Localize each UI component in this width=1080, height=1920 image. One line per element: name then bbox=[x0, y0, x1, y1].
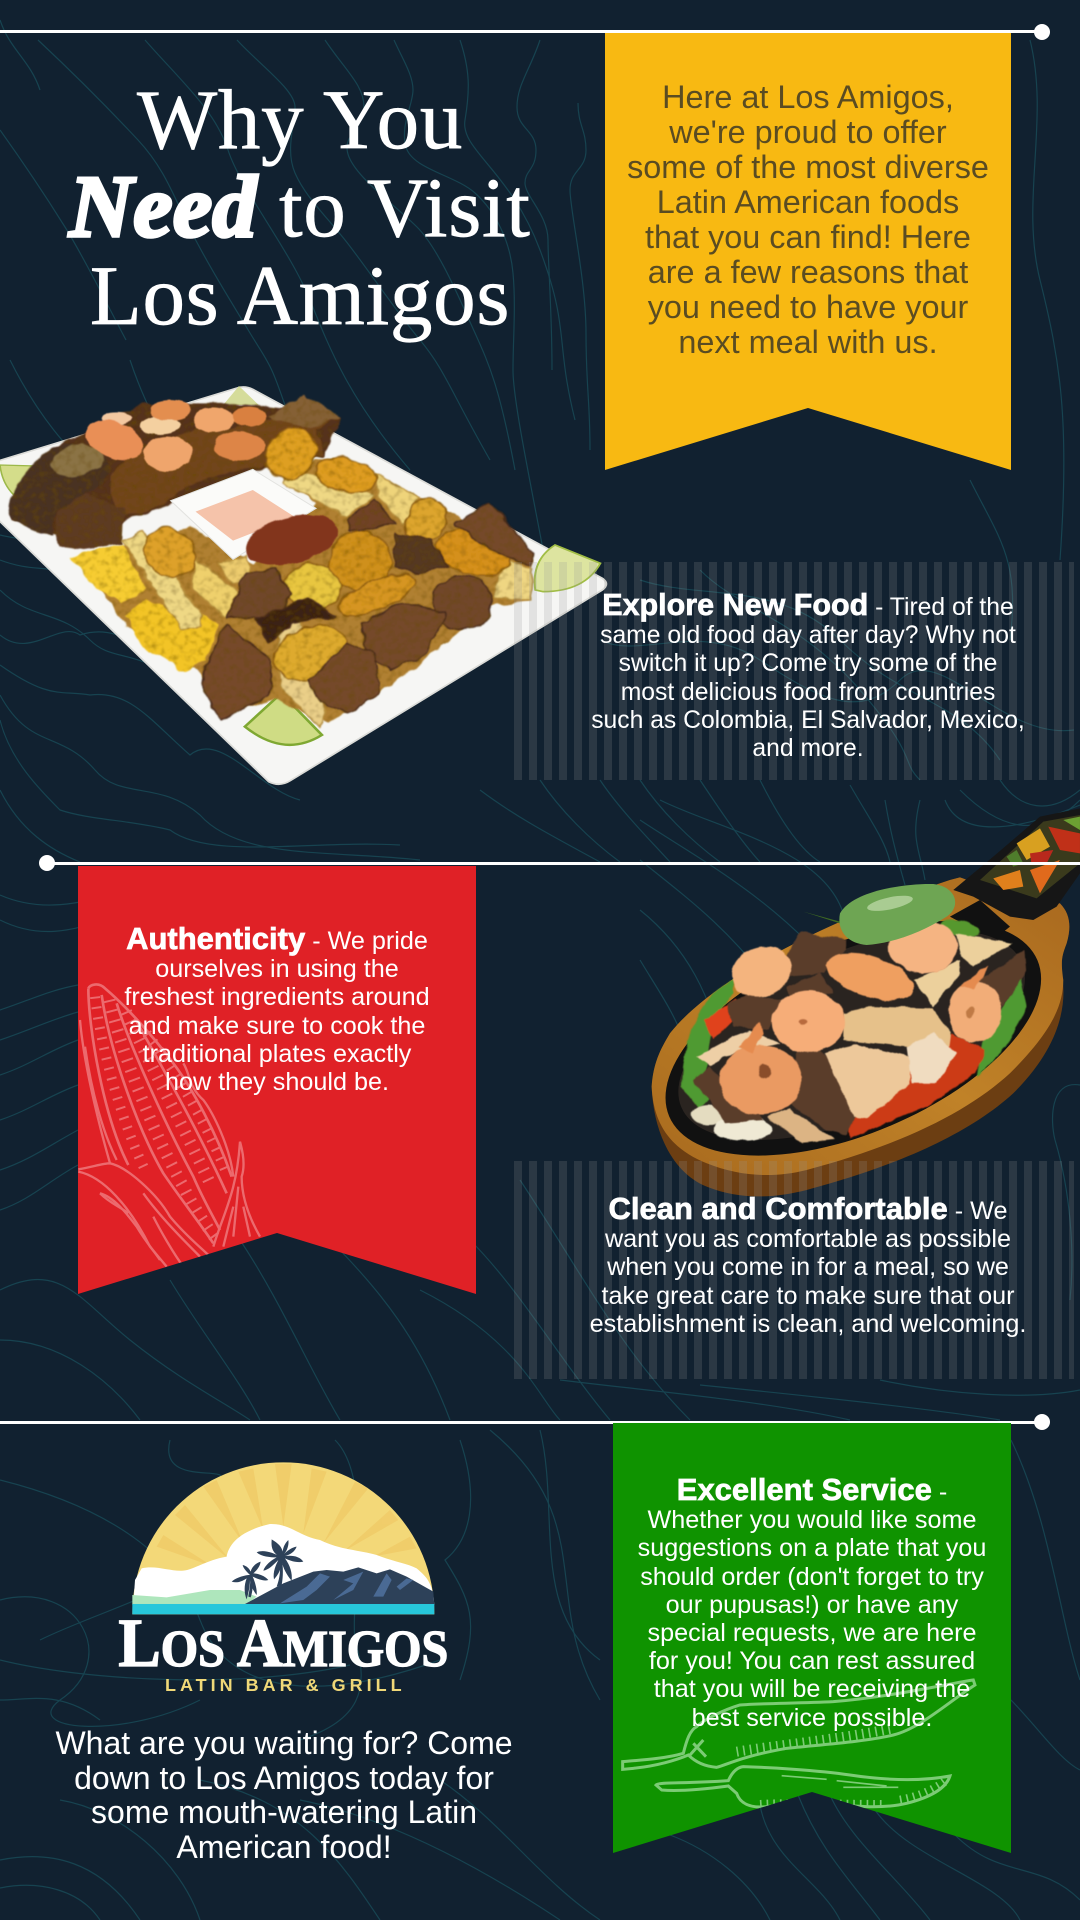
wordmark: LOS AMIGOS bbox=[118, 1605, 448, 1681]
intro text: next meal with us. bbox=[678, 324, 938, 360]
text: explore new food: switch it up? Come try some of the bbox=[619, 650, 997, 677]
panel: green ribbon bbox=[613, 1423, 1011, 1853]
text: excellent service: Excellent Service - bbox=[677, 1472, 947, 1507]
text: excellent service: our pupusas!) or have any bbox=[666, 1591, 958, 1619]
yuca sticks bbox=[122, 467, 533, 727]
lower divider line with dot bbox=[0, 1414, 1050, 1430]
text: explore new food bbox=[591, 588, 1025, 762]
mint hills bbox=[132, 1590, 257, 1605]
tagline: LATIN BAR & GRILL bbox=[165, 1675, 402, 1695]
clouds bbox=[133, 1524, 434, 1605]
fish bbox=[9, 395, 340, 550]
iron skillet bbox=[632, 873, 1075, 1204]
yellow tostones bbox=[71, 543, 219, 672]
sauce bowl bbox=[171, 469, 316, 559]
panel: yellow intro ribbon bbox=[605, 33, 1011, 470]
text: clean and comfortable: when you come in for a meal, so we bbox=[607, 1253, 1009, 1281]
closing text: some mouth-watering Latin bbox=[91, 1794, 477, 1830]
striped panel: explore new food bbox=[514, 562, 1074, 780]
text: authenticity: Authenticity - We pride bbox=[126, 921, 428, 956]
intro text: you need to have your bbox=[648, 289, 968, 325]
intro text: we're proud to offer bbox=[669, 114, 947, 150]
intro text: that you can find! Here bbox=[645, 219, 971, 255]
water bbox=[132, 1604, 434, 1614]
text: explore new food: such as Colombia, El Salvador, Mexico, bbox=[591, 707, 1025, 734]
title: Los Amigos bbox=[90, 249, 510, 343]
text: clean and comfortable: take great care to make sure that our bbox=[601, 1282, 1014, 1310]
title: Why You bbox=[137, 73, 463, 167]
text: clean and comfortable: Clean and Comfortable - We bbox=[608, 1191, 1008, 1226]
peppers under food bbox=[682, 916, 1027, 1138]
text: clean and comfortable: want you as comfortable as possible bbox=[605, 1225, 1011, 1253]
text: excellent service: should order (don't forget to try bbox=[640, 1563, 984, 1591]
text: excellent service: suggestions on a plate that you bbox=[638, 1534, 986, 1562]
text: excellent service: for you! You can rest assured bbox=[649, 1647, 975, 1675]
closing text: down to Los Amigos today for bbox=[74, 1760, 494, 1796]
text: clean and comfortable bbox=[590, 1191, 1026, 1338]
intro text: are a few reasons that bbox=[648, 254, 968, 290]
shrimp on fish bbox=[78, 400, 267, 471]
text: authenticity: ourselves in using the bbox=[155, 955, 399, 983]
icon: corn sketch bbox=[78, 984, 260, 1267]
oven mitt handle bbox=[953, 808, 1080, 920]
plate bbox=[0, 387, 606, 784]
title bbox=[66, 73, 531, 343]
panel: red ribbon bbox=[78, 866, 476, 1294]
intro text: Here at Los Amigos, bbox=[662, 79, 954, 115]
text: explore new food: Explore New Food - Tired of the bbox=[602, 588, 1014, 622]
text: explore new food: most delicious food from countries bbox=[621, 679, 995, 706]
mountain bbox=[245, 1567, 434, 1606]
food photo: sizzling fajita skillet bbox=[200, 410, 1080, 1196]
jalapeno bbox=[803, 884, 955, 945]
wooden board bbox=[652, 877, 1069, 1196]
text: excellent service: Whether you would like some bbox=[648, 1506, 976, 1534]
fried meat chunks bbox=[203, 498, 533, 720]
limes bbox=[0, 386, 600, 745]
text: excellent service: best service possible. bbox=[692, 1704, 932, 1732]
intro text bbox=[627, 79, 989, 360]
text: clean and comfortable: establishment is clean, and welcoming. bbox=[590, 1310, 1026, 1338]
text: authenticity: and make sure to cook the bbox=[129, 1012, 425, 1040]
palm trees bbox=[232, 1539, 303, 1599]
intro text: some of the most diverse bbox=[627, 149, 989, 185]
text: authenticity: traditional plates exactly bbox=[143, 1040, 411, 1068]
steak bbox=[693, 932, 1027, 1135]
sun bbox=[132, 1462, 434, 1614]
text: excellent service: that you will be receiving the bbox=[654, 1675, 970, 1703]
text: excellent service bbox=[638, 1472, 986, 1732]
text: authenticity bbox=[124, 921, 430, 1096]
onions bbox=[692, 1105, 773, 1140]
fried plantains bbox=[137, 422, 518, 692]
text: explore new food: same old food day after day? Why not bbox=[600, 622, 1016, 649]
chicken bbox=[697, 933, 1013, 1143]
text: explore new food: and more. bbox=[752, 735, 864, 762]
food photo: fried platter on white plate bbox=[0, 386, 608, 786]
closing text: What are you waiting for? Come bbox=[55, 1725, 513, 1761]
shrimp bbox=[719, 920, 1002, 1115]
closing text: American food! bbox=[176, 1829, 392, 1865]
text: authenticity: how they should be. bbox=[165, 1068, 389, 1096]
icon: chili peppers sketch bbox=[623, 1680, 975, 1807]
top divider line with dot bbox=[0, 24, 1050, 40]
title: Need to Visit bbox=[69, 159, 531, 256]
sausage bbox=[237, 506, 346, 574]
middle divider line with dot bbox=[39, 855, 1080, 871]
intro text: Latin American foods bbox=[657, 184, 959, 220]
striped panel: clean and comfortable bbox=[514, 1161, 1074, 1379]
food base layer bbox=[12, 403, 533, 723]
text: excellent service: special requests, we are here bbox=[647, 1619, 976, 1647]
text: authenticity: freshest ingredients around bbox=[124, 983, 430, 1011]
closing text bbox=[55, 1725, 513, 1865]
